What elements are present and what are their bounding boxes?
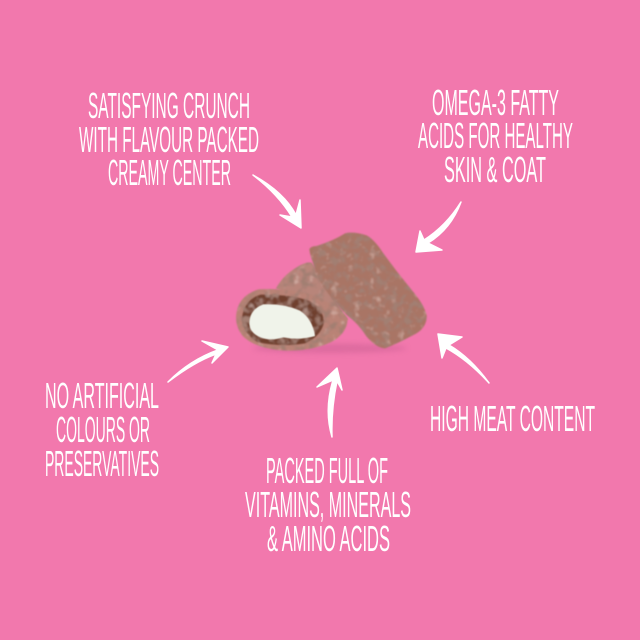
snack pieces [236,233,427,353]
arrow: bottom right [438,334,489,383]
text: PACKED FULL OF [266,450,388,491]
text: WITH FLAVOUR PACKED [79,119,259,160]
arrow: left [168,341,228,382]
text: VITAMINS, MINERALS [245,484,411,525]
text: SATISFYING CRUNCH [88,85,250,126]
arrow: top left [253,175,301,228]
callout: no artificial colours [45,375,159,484]
text: CREAMY CENTER [108,152,231,193]
cream filling [249,304,315,339]
text: COLOURS OR [56,409,150,450]
arrow: bottom [317,368,342,437]
text: NO ARTIFICIAL [45,375,159,416]
front pillow [236,289,347,351]
back pillow [276,263,348,320]
callout: omega-3 [418,82,573,190]
callout: vitamins: & AMINO ACIDS [267,518,390,559]
arrow: top right [416,202,461,252]
callout: vitamins [245,450,411,559]
shadow [253,344,407,353]
callout: satisfying crunch [79,85,259,193]
right pillow [309,233,427,348]
cut face [242,295,324,345]
text: PRESERVATIVES [45,443,159,484]
